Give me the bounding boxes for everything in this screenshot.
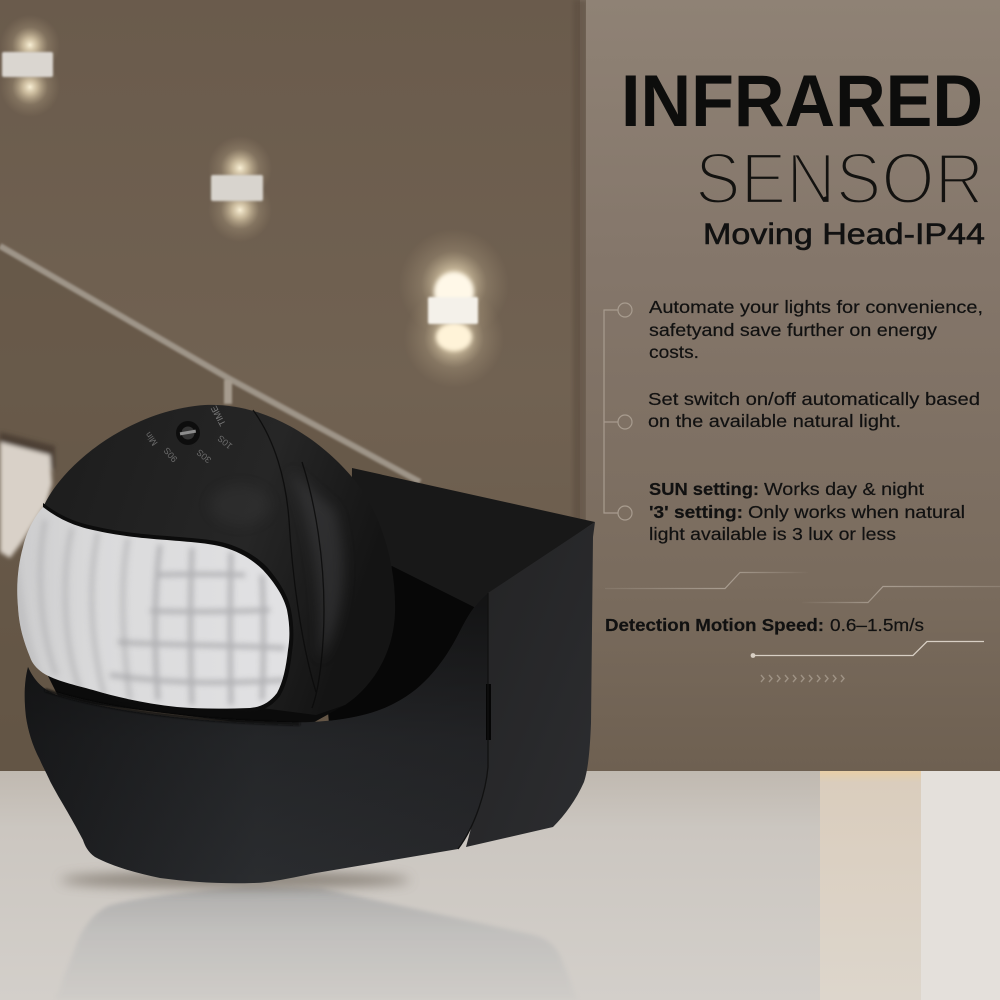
detection motion speed (605, 615, 924, 635)
feature text: automate: safetyand save further on energy (649, 320, 937, 340)
base top rim shadow (45, 690, 300, 724)
side slot (486, 684, 491, 740)
title block (621, 61, 985, 251)
bracket right side (466, 522, 595, 847)
feature text: automate: costs. (649, 342, 699, 362)
feature text: settings: light available is 3 lux or less (649, 524, 896, 544)
base seam (458, 593, 488, 849)
feature text: settings: Only works when natural (748, 502, 965, 522)
title: infrared: INFRARED (621, 61, 983, 142)
sensor ball (42, 405, 395, 715)
product: motion sensor (10, 404, 595, 883)
white stair step (0, 432, 55, 558)
lens dark border (43, 503, 293, 712)
lens left edge shade (18, 576, 38, 669)
detection motion speed: 0.6–1.5m/s (830, 615, 924, 635)
feature text: natural light switch: on the available natural light. (648, 411, 901, 431)
subtitle: Moving Head-IP44 (703, 218, 985, 251)
lens grid (110, 545, 285, 705)
dial and time settings: 30S (195, 447, 213, 465)
decorative circuit lines (605, 572, 1000, 602)
circuit line with dot (751, 642, 984, 658)
dial and time settings: 90S (162, 445, 180, 464)
front base (25, 593, 488, 883)
ball highlight (290, 470, 343, 660)
feature text: automate: Automate your lights for convenience, (649, 297, 983, 317)
feature text: settings: SUN setting: (649, 479, 759, 499)
stair banister (0, 246, 420, 482)
dial and time settings: TIME (209, 404, 228, 428)
light 3 (399, 229, 509, 388)
detection motion speed: Detection Motion Speed: (605, 615, 824, 635)
lens left stripes (40, 520, 130, 700)
bracket inner shadow (320, 566, 488, 735)
timeline connector with three nodes (604, 303, 632, 520)
bracket back wall (350, 468, 595, 640)
dial and time settings: 10S (216, 433, 234, 451)
light 2 (208, 136, 272, 242)
feature text: settings: Works day & night (764, 479, 924, 499)
dial and time settings (143, 404, 234, 465)
contact shadow (60, 872, 410, 888)
lens (17, 507, 290, 709)
feature text: settings (649, 479, 965, 544)
feature text: natural light switch: Set switch on/off automatically based (648, 389, 980, 409)
floor reflection (55, 886, 578, 1000)
ball seams (253, 410, 324, 708)
title: sensor: SENSOR (695, 140, 984, 220)
dark interior between lens and base (30, 640, 345, 730)
feature text: automate (649, 297, 983, 362)
light 1 (0, 15, 60, 117)
feature text: settings: '3' setting: (649, 502, 743, 522)
dial and time settings: Min (143, 430, 160, 448)
ball highlight upper (210, 485, 270, 525)
chevron row (761, 675, 844, 682)
base top shading (25, 593, 488, 883)
feature text: natural light switch (648, 389, 980, 431)
wall lights (0, 15, 509, 388)
